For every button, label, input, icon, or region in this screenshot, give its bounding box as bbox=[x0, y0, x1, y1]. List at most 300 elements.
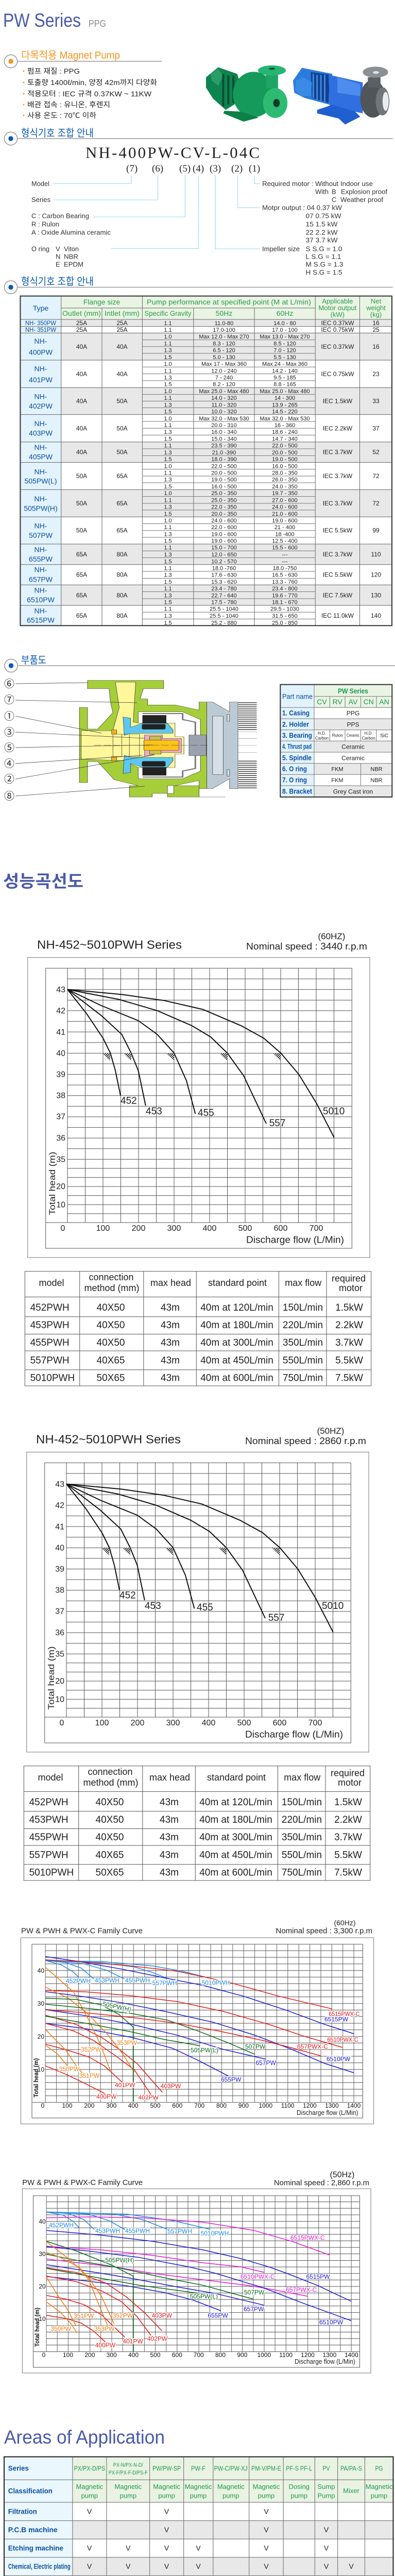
chart: 50Hz PWH series: 452 bbox=[119, 1590, 136, 1601]
row NH-6510PW bbox=[27, 586, 381, 605]
row NH-405PW: IEC 3.7kW bbox=[323, 448, 353, 455]
chart: 60Hz PWH series: 40 bbox=[56, 1049, 65, 1058]
parts table: 3. Bearing bbox=[282, 731, 312, 739]
chart: 50Hz PWH series: 500 bbox=[237, 1719, 251, 1727]
chart: 60Hz PWH series: 43 bbox=[56, 986, 65, 994]
series header row: PX-F/PX-F-D/PS-F bbox=[109, 2470, 148, 2476]
chart: 60Hz PWH series: 10 bbox=[56, 1200, 65, 1210]
model code diagram: L S.G = 1.1 bbox=[306, 252, 341, 261]
row NH-505PW(L): 16.0 - 500 bbox=[211, 484, 237, 490]
chart: 60Hz PWH series: 600 bbox=[274, 1224, 287, 1233]
chart: 60Hz PWH series: 557 bbox=[269, 1118, 285, 1129]
curves 50Hz family bbox=[46, 2212, 351, 2352]
row NH-403PW: Max 32.0 - Max 530 bbox=[260, 416, 310, 422]
model code diagram: (4) bbox=[193, 163, 204, 174]
classification row: Magnetic bbox=[366, 2483, 393, 2490]
labels 50Hz family: 507PW bbox=[244, 2289, 265, 2296]
labels 50Hz family: 505PW(L) bbox=[190, 2293, 218, 2300]
table: 60Hz PWH models: 5.5kW bbox=[335, 1355, 363, 1366]
row NH-507PW: NH- bbox=[35, 521, 47, 530]
chart: 50Hz PWH series: 300 bbox=[166, 1719, 180, 1727]
row NH-6515PW: 25.0 - 850 bbox=[272, 620, 298, 626]
axes 50Hz family: 500 bbox=[150, 2351, 161, 2359]
feature list: 펌프 재질 : PPG bbox=[27, 67, 80, 75]
table header: Pump performance at specified point (M at L/min) bbox=[147, 298, 311, 306]
chart: 60Hz PWH series: 200 bbox=[132, 1224, 145, 1233]
table header: (kg) bbox=[370, 311, 382, 318]
section: 50Hz performance curve bbox=[24, 1426, 371, 1880]
table: 60Hz PWH models: required bbox=[332, 1274, 366, 1284]
row NH-655PW: 65A bbox=[76, 551, 87, 558]
rows NH-350PW and NH-351PW: NH- 350PW bbox=[25, 319, 57, 327]
axes 60Hz family: 40 bbox=[38, 1967, 44, 1974]
chart: 50Hz PWH series: 43 bbox=[55, 1480, 64, 1489]
row NH-403PW: 1.3 bbox=[164, 429, 172, 435]
application check marks bbox=[87, 2507, 382, 2576]
row NH-402PW: Max 25.0 - Max 480 bbox=[260, 388, 310, 395]
row NH-505PW(H): 24.0 - 600 bbox=[272, 504, 298, 511]
chart: 60Hz PWH series: 37 bbox=[56, 1113, 65, 1121]
heading: type code: 형식기호 조합 안내 bbox=[21, 127, 94, 139]
row NH-400PW: 8.3 - 120 bbox=[213, 341, 235, 347]
rows NH-350PW and NH-351PW: 16 bbox=[372, 319, 380, 327]
row NH-507PW: 1.3 bbox=[164, 531, 172, 537]
heading: Magnet Pump features: 다목적용 Magnet Pump bbox=[21, 49, 120, 61]
model code diagram: A : Oxide Alumina ceramic bbox=[31, 229, 111, 236]
parts table: FKM bbox=[331, 777, 344, 784]
table: 50Hz PWH models: motor bbox=[338, 1777, 362, 1788]
chart: 60Hz PWH series: 700 bbox=[310, 1224, 323, 1233]
model code diagram: NBR bbox=[64, 252, 78, 261]
chart: 50Hz PWH series: 400 bbox=[202, 1719, 215, 1727]
row NH-505PW(H): 65A bbox=[116, 500, 128, 507]
feature list: 토출량 1400ℓ/min, 양정 42m까지 다양화 bbox=[27, 78, 157, 87]
row NH-505PW(L): 1.3 bbox=[164, 477, 172, 483]
row NH-655PW: NH- bbox=[35, 546, 47, 554]
table: 60Hz PWH models: 453PWH bbox=[30, 1320, 70, 1331]
feature list bbox=[23, 67, 157, 120]
table: 60Hz PWH models: 43m bbox=[161, 1355, 180, 1366]
labels 60Hz family: 453PWH bbox=[95, 1977, 119, 1984]
labels 60Hz family: 400PW bbox=[96, 2093, 117, 2100]
table: 50Hz PWH models: 550L/min bbox=[282, 1850, 322, 1861]
parts table: PPG bbox=[347, 710, 359, 717]
chart: 60Hz PWH series: 38 bbox=[56, 1091, 65, 1100]
table: 50Hz PWH models: standard point bbox=[207, 1772, 266, 1783]
axes 60Hz family: 1100 bbox=[281, 2102, 295, 2109]
table header: Type bbox=[33, 304, 48, 312]
model code diagram: Weather proof bbox=[340, 196, 383, 204]
specification table bbox=[20, 296, 392, 626]
row NH-505PW(L): 1.5 bbox=[164, 484, 172, 490]
axes 50Hz family: Discharge flow (L/Min) bbox=[295, 2358, 355, 2365]
series header row: PM-V/PM-E bbox=[251, 2465, 281, 2472]
labels 60Hz family: 351PW bbox=[79, 2072, 100, 2079]
chart: 60Hz PWH series: 41 bbox=[56, 1028, 65, 1037]
table: 50Hz PWH models: 40m at 180L/min bbox=[199, 1815, 272, 1825]
row NH-657PW: 1.5 bbox=[164, 579, 172, 585]
row NH-401PW: 12.0 - 240 bbox=[211, 368, 237, 374]
model code diagram: 37 3.7 kW bbox=[306, 236, 338, 244]
labels 60Hz family: 6515PW bbox=[324, 2015, 349, 2023]
labels 50Hz family: 6515PWX-C bbox=[290, 2234, 325, 2241]
row NH-403PW: 1.0 bbox=[164, 416, 172, 422]
classification row: Magnetic bbox=[253, 2483, 280, 2490]
table: 60Hz PWH models: max flow bbox=[285, 1278, 322, 1288]
labels 60Hz family: 350PW bbox=[59, 2065, 80, 2073]
row NH-402PW: 1.1 bbox=[164, 395, 172, 401]
row NH-401PW: 40A bbox=[76, 370, 87, 378]
axes 50Hz family: 30 bbox=[39, 2250, 46, 2258]
section: areas of application bbox=[4, 2427, 393, 2576]
row NH-403PW: 14.7 - 340 bbox=[272, 436, 298, 442]
row NH-6510PW: 23.4 - 780 bbox=[211, 586, 237, 592]
application check marks: VVVVVVV bbox=[87, 2562, 354, 2570]
table: 60Hz PWH models: 43m bbox=[161, 1320, 180, 1331]
labels 60Hz family: 353PW bbox=[117, 2039, 138, 2046]
section: 60Hz performance curve bbox=[3, 872, 372, 1386]
row NH-400PW: 6.5 - 120 bbox=[213, 348, 235, 354]
model code diagram: R : Rulon bbox=[31, 221, 59, 228]
row NH-400PW: 40A bbox=[76, 343, 87, 350]
table: 60Hz PWH models: 40m at 120L/min bbox=[200, 1302, 273, 1313]
row NH-505PW(L): 1.0 bbox=[164, 463, 172, 469]
labels 60Hz family: 505PW(L) bbox=[191, 2046, 218, 2054]
chart: 50Hz PWH series: 10 bbox=[55, 1695, 64, 1704]
row NH-507PW: 99 bbox=[372, 527, 380, 534]
parts table: CN bbox=[364, 698, 374, 706]
rows NH-350PW and NH-351PW: 25A bbox=[76, 326, 87, 333]
row NH-507PW bbox=[29, 518, 380, 544]
table: 60Hz PWH models: model bbox=[39, 1278, 64, 1288]
row NH-505PW(H): 1.3 bbox=[164, 504, 172, 511]
chart: 60Hz PWH series: 400 bbox=[203, 1224, 216, 1233]
parts table: 2. Holder bbox=[282, 720, 309, 728]
row NH-507PW: 19.0 - 600 bbox=[272, 518, 298, 524]
table: 50Hz PWH models: 40X65 bbox=[96, 1850, 124, 1861]
row NH-6510PW: 1.3 bbox=[164, 592, 172, 599]
heading: Magnet Pump features bbox=[4, 49, 162, 68]
table: 50Hz PWH models: 1.5kW bbox=[334, 1797, 362, 1808]
table: 50Hz PWH models: 350L/min bbox=[282, 1832, 322, 1843]
rows NH-350PW and NH-351PW: 25A bbox=[116, 326, 128, 333]
model code diagram: 07 0.75 kW bbox=[306, 212, 341, 219]
application row labels bbox=[8, 2507, 71, 2576]
table: 60Hz PWH models: 220L/min bbox=[283, 1320, 323, 1331]
row NH-401PW: 7 - 240 bbox=[215, 375, 233, 381]
table: 60Hz PWH models bbox=[25, 1272, 371, 1386]
table: 50Hz PWH models: 43m bbox=[160, 1867, 179, 1878]
row NH-405PW: 18.0 - 390 bbox=[211, 456, 237, 463]
row NH-657PW: 15.3 - 620 bbox=[211, 579, 237, 585]
model code diagram: (1) bbox=[249, 163, 260, 174]
table: 60Hz PWH models: 40m at 180L/min bbox=[200, 1320, 273, 1331]
row NH-505PW(L): 16.0 - 500 bbox=[272, 463, 298, 469]
labels 60Hz family: 403PW bbox=[161, 2082, 181, 2090]
row NH-507PW: 507PW bbox=[29, 531, 53, 539]
row NH-405PW: 1.5 bbox=[164, 456, 172, 463]
parts table: AN bbox=[379, 698, 389, 706]
row NH-505PW(H): IEC 3.7kW bbox=[323, 500, 353, 507]
row NH-405PW: 23.5 - 390 bbox=[211, 443, 237, 449]
labels 50Hz family: 452PWH bbox=[49, 2222, 74, 2229]
classification row: pump bbox=[81, 2492, 98, 2500]
chart: 50Hz PWH series: 40 bbox=[55, 1544, 64, 1553]
row NH-505PW(L): 19.0 - 500 bbox=[211, 477, 237, 483]
row NH-400PW: 1.5 bbox=[164, 354, 172, 361]
chart: 50Hz PWH series: 100 bbox=[95, 1719, 109, 1727]
row NH-657PW: 13.3 - 760 bbox=[272, 579, 298, 585]
row NH-403PW: IEC 2.2kW bbox=[323, 425, 353, 432]
series header row: PW-F bbox=[191, 2465, 205, 2472]
table header: Flange size bbox=[83, 298, 121, 306]
row NH-403PW: 16.0 - 340 bbox=[211, 429, 237, 435]
chart: 50Hz PWH series: 38 bbox=[55, 1586, 64, 1595]
labels 60Hz family: 402PW bbox=[138, 2094, 159, 2101]
chart: 60Hz PWH series: 452 bbox=[121, 1095, 137, 1107]
labels 60Hz family: 6510PWX-C bbox=[328, 2036, 358, 2043]
row NH-403PW: Max 32.0 - Max 530 bbox=[199, 416, 249, 422]
model code diagram: Explosion proof bbox=[341, 188, 387, 196]
row NH-401PW: 9.5 - 185 bbox=[273, 375, 296, 381]
classification row: pump bbox=[291, 2492, 307, 2500]
axes 50Hz family: 1100 bbox=[279, 2351, 293, 2359]
axes 60Hz family bbox=[32, 1967, 361, 2116]
row NH-6510PW: NH- bbox=[35, 586, 47, 595]
row NH-401PW: 8.8 - 165 bbox=[273, 382, 296, 388]
table: 60Hz PWH models: 40X65 bbox=[97, 1355, 125, 1366]
row NH-505PW(H): 22.0 - 350 bbox=[211, 504, 237, 511]
labels 50Hz family: 402PW bbox=[147, 2335, 168, 2342]
chart: 60Hz PWH series: 453 bbox=[146, 1106, 162, 1117]
table: 50Hz PWH models: model bbox=[38, 1772, 63, 1783]
labels 50Hz family: 351PW bbox=[74, 2312, 94, 2319]
row NH-655PW: 10.2 - 570 bbox=[211, 558, 237, 565]
row NH-405PW: NH- bbox=[35, 443, 47, 451]
row NH-400PW: 8.5 - 120 bbox=[273, 341, 296, 347]
labels 50Hz family: 400PW bbox=[95, 2342, 116, 2349]
table: 50Hz PWH models: 40m at 120L/min bbox=[199, 1797, 272, 1808]
row NH-6510PW: 22.7 - 640 bbox=[211, 592, 237, 599]
row NH-505PW(L): 50A bbox=[76, 472, 87, 480]
row NH-655PW: --- bbox=[282, 558, 288, 565]
row NH-6515PW: 1.1 bbox=[164, 606, 172, 613]
axes 60Hz family: 100 bbox=[62, 2102, 73, 2109]
row NH-402PW: 10.0 - 320 bbox=[211, 409, 237, 415]
row NH-6510PW: 23.4 - 800 bbox=[272, 586, 298, 592]
chart: 50Hz PWH series: 39 bbox=[55, 1565, 64, 1573]
row NH-400PW: 1.1 bbox=[164, 341, 172, 347]
parts table: Rulon bbox=[332, 733, 343, 738]
axes 50Hz family: 20 bbox=[39, 2283, 46, 2290]
row NH-657PW: 17.6 - 630 bbox=[211, 572, 237, 579]
table: 60Hz PWH models: 40m at 600L/min bbox=[200, 1372, 273, 1384]
rows NH-350PW and NH-351PW: 11.0-80 bbox=[215, 320, 233, 327]
parts table: PW Series bbox=[338, 687, 368, 695]
labels 60Hz family: 352PW bbox=[81, 2046, 101, 2053]
chart: 60Hz PWH series: 36 bbox=[56, 1134, 65, 1143]
row NH-401PW bbox=[29, 361, 380, 388]
row NH-505PW(L): 28.0 - 350 bbox=[272, 470, 298, 476]
table: 50Hz PWH models: 7.5kW bbox=[334, 1867, 362, 1878]
chart: 60Hz PWH series: 20 bbox=[56, 1182, 65, 1191]
classification row: Magnetic bbox=[76, 2483, 104, 2490]
row NH-403PW: 50A bbox=[116, 425, 128, 432]
chart: 50Hz PWH series: Total head (m) bbox=[46, 1647, 56, 1709]
application check marks: VVV bbox=[87, 2507, 269, 2515]
row NH-402PW: 11.0 - 320 bbox=[212, 402, 236, 408]
chart: 50Hz PWH series: (50HZ) bbox=[317, 1426, 344, 1436]
labels 50Hz family: 353PW bbox=[94, 2325, 115, 2332]
parts table: Grey Cast iron bbox=[333, 788, 373, 795]
row NH-400PW: 16 bbox=[372, 343, 380, 350]
parts table: PPS bbox=[347, 721, 359, 728]
table: 50Hz PWH models: 50X65 bbox=[96, 1867, 124, 1878]
chart: 60Hz PWH series: (60HZ) bbox=[318, 931, 345, 941]
icon: blue pump photo bbox=[293, 66, 389, 125]
callout numbers: ⑧ bbox=[4, 790, 14, 802]
table: 50Hz PWH models: 452PWH bbox=[29, 1797, 68, 1808]
chart: 50Hz PWH series: Nominal speed : 2860 r.p.m bbox=[245, 1436, 366, 1446]
row NH-6510PW: 18.1 - 670 bbox=[272, 599, 298, 605]
axes 60Hz family: 700 bbox=[194, 2102, 205, 2109]
series header row: PV bbox=[322, 2465, 330, 2472]
row NH-6515PW: 25.2 - 880 bbox=[211, 620, 237, 626]
row NH-657PW: 80A bbox=[116, 571, 128, 579]
row NH-401PW: 40A bbox=[116, 370, 128, 378]
table: 60Hz PWH models: 43m bbox=[161, 1302, 180, 1313]
parts table: Carbon bbox=[315, 736, 329, 741]
feature list: 적용모터 : IEC 규격 0.37KW ~ 11KW bbox=[27, 90, 152, 98]
row NH-6515PW: 25.5 - 1040 bbox=[210, 613, 238, 619]
row NH-657PW bbox=[29, 565, 381, 585]
row NH-403PW: 20.0 - 310 bbox=[211, 422, 237, 429]
chart: 50Hz PWH series: 557 bbox=[268, 1613, 284, 1623]
callout numbers: ② bbox=[4, 773, 14, 785]
table: 60Hz PWH models: 1.5kW bbox=[335, 1302, 363, 1313]
row NH-505PW(L): 26.0 - 350 bbox=[272, 477, 298, 483]
labels 60Hz family bbox=[59, 1977, 360, 2101]
chart: 60Hz PWH series: 35 bbox=[56, 1155, 65, 1164]
table: 50Hz PWH models: 150L/min bbox=[282, 1797, 322, 1808]
chart: 50Hz PWH series: 42 bbox=[55, 1501, 64, 1510]
labels 50Hz family: 655PW bbox=[208, 2312, 228, 2319]
row NH-405PW: 50A bbox=[116, 448, 128, 455]
table header: Specific Gravity bbox=[144, 309, 192, 317]
row NH-403PW: NH- bbox=[35, 419, 47, 428]
curves 60Hz bbox=[67, 989, 334, 1138]
labels 60Hz family: 401PW bbox=[115, 2081, 135, 2089]
series header row: PG bbox=[375, 2465, 383, 2472]
curves 50Hz bbox=[66, 1484, 333, 1632]
heading: parts diagram: 부품도 bbox=[21, 655, 46, 666]
row NH-401PW: 1.1 bbox=[164, 368, 172, 374]
row NH-655PW: 80A bbox=[116, 551, 128, 558]
model code diagram: Required motor : Without Indoor use bbox=[262, 180, 373, 188]
callout numbers: ⑥ bbox=[4, 678, 14, 690]
parts table: FKM bbox=[331, 767, 344, 773]
axes 60Hz family: 1300 bbox=[325, 2102, 339, 2109]
parts table: 1. Casing bbox=[282, 709, 310, 717]
model code diagram: Motpr output : 04 0.37 kW bbox=[262, 204, 342, 211]
row NH-655PW: 1.3 bbox=[164, 552, 172, 558]
table: 60Hz PWH models: 452PWH bbox=[30, 1302, 70, 1313]
row NH-505PW(H): 1.0 bbox=[164, 490, 172, 497]
axes 50Hz family: 300 bbox=[107, 2351, 117, 2359]
row NH-402PW: 402PW bbox=[29, 402, 53, 410]
callout numbers: ⑤ bbox=[4, 742, 14, 754]
table: 60Hz PWH models: 550L/min bbox=[283, 1355, 323, 1366]
table: 50Hz PWH models: max flow bbox=[284, 1772, 321, 1783]
parts table: Part name bbox=[282, 692, 313, 701]
row NH-6515PW: 1.3 bbox=[164, 613, 172, 619]
parts table: 5. Spindle bbox=[282, 753, 312, 761]
axes 50Hz family: 0 bbox=[42, 2351, 46, 2359]
row NH-400PW: 40A bbox=[116, 343, 128, 350]
row NH-655PW: 15.5 - 600 bbox=[272, 545, 298, 551]
parts table: 6. O ring bbox=[282, 765, 307, 773]
table: 60Hz PWH models: 3.7kW bbox=[335, 1337, 363, 1348]
row NH-401PW: 1.3 bbox=[164, 375, 172, 381]
row NH-505PW(H) bbox=[24, 490, 380, 517]
model code diagram: Viton bbox=[64, 245, 79, 252]
table: 60Hz PWH models: standard point bbox=[208, 1278, 267, 1288]
table: 50Hz PWH models: 455PWH bbox=[29, 1832, 68, 1843]
row NH-403PW: 16 - 360 bbox=[274, 422, 295, 429]
labels 50Hz family: 350PW bbox=[50, 2325, 72, 2332]
axes 60Hz family: Total head (m) bbox=[32, 2058, 40, 2097]
chart: family curve 50Hz: (50Hz) bbox=[330, 2171, 355, 2179]
chart: 50Hz PWH series: 36 bbox=[55, 1629, 64, 1637]
row NH-400PW: 1.3 bbox=[164, 348, 172, 354]
application check marks: VVVVVV bbox=[87, 2544, 329, 2552]
chart: 60Hz PWH series: Discharge flow (L/Min) bbox=[246, 1234, 344, 1245]
chart: 50Hz PWH series: Discharge flow (L/Min) bbox=[245, 1729, 343, 1739]
labels 50Hz family: 657PW bbox=[244, 2306, 264, 2313]
labels 50Hz family: 657PWX-C bbox=[286, 2286, 317, 2293]
labels 50Hz family: 505PW(H) bbox=[105, 2257, 134, 2264]
row NH-402PW: 1.5 bbox=[164, 409, 172, 415]
table header: Motor output bbox=[318, 304, 357, 312]
table: 50Hz PWH models: 2.2kW bbox=[334, 1815, 362, 1825]
row NH-507PW: 21 - 400 bbox=[274, 524, 295, 531]
model code diagram: H S.G = 1.5 bbox=[306, 268, 342, 276]
callout numbers bbox=[4, 678, 14, 802]
chart: 50Hz PWH series: 453 bbox=[145, 1601, 161, 1612]
row NH-402PW: 1.3 bbox=[164, 402, 172, 408]
row NH-507PW: 22.0 - 600 bbox=[211, 524, 237, 531]
series header row: PW-C/PW-XJ bbox=[214, 2465, 248, 2472]
row NH-400PW: NH- bbox=[35, 337, 47, 345]
model code diagram: V bbox=[56, 245, 60, 252]
model code diagram: NH-400PW-CV-L-04C bbox=[85, 144, 260, 162]
row NH-405PW: 405PW bbox=[29, 452, 53, 461]
axes 60Hz family: 600 bbox=[172, 2102, 183, 2109]
model code diagram: (5) bbox=[179, 163, 191, 174]
row NH-505PW(L): IEC 3.7kW bbox=[323, 472, 353, 480]
classification row: Pump bbox=[318, 2492, 335, 2500]
axes 50Hz family: 600 bbox=[172, 2351, 182, 2359]
chart: 50Hz PWH series: 35 bbox=[55, 1650, 64, 1659]
table: 60Hz PWH models: method (mm) bbox=[84, 1283, 140, 1293]
parts table: 8. Bracket bbox=[282, 787, 312, 795]
row NH-402PW: 13.9 - 265 bbox=[272, 402, 298, 408]
table header: Applicable bbox=[322, 297, 353, 305]
table: 60Hz PWH models: 50X65 bbox=[97, 1372, 125, 1384]
labels 60Hz family: 452PWH bbox=[66, 1977, 91, 1985]
classification row: pump bbox=[222, 2492, 239, 2500]
model code diagram: Series bbox=[31, 196, 50, 204]
